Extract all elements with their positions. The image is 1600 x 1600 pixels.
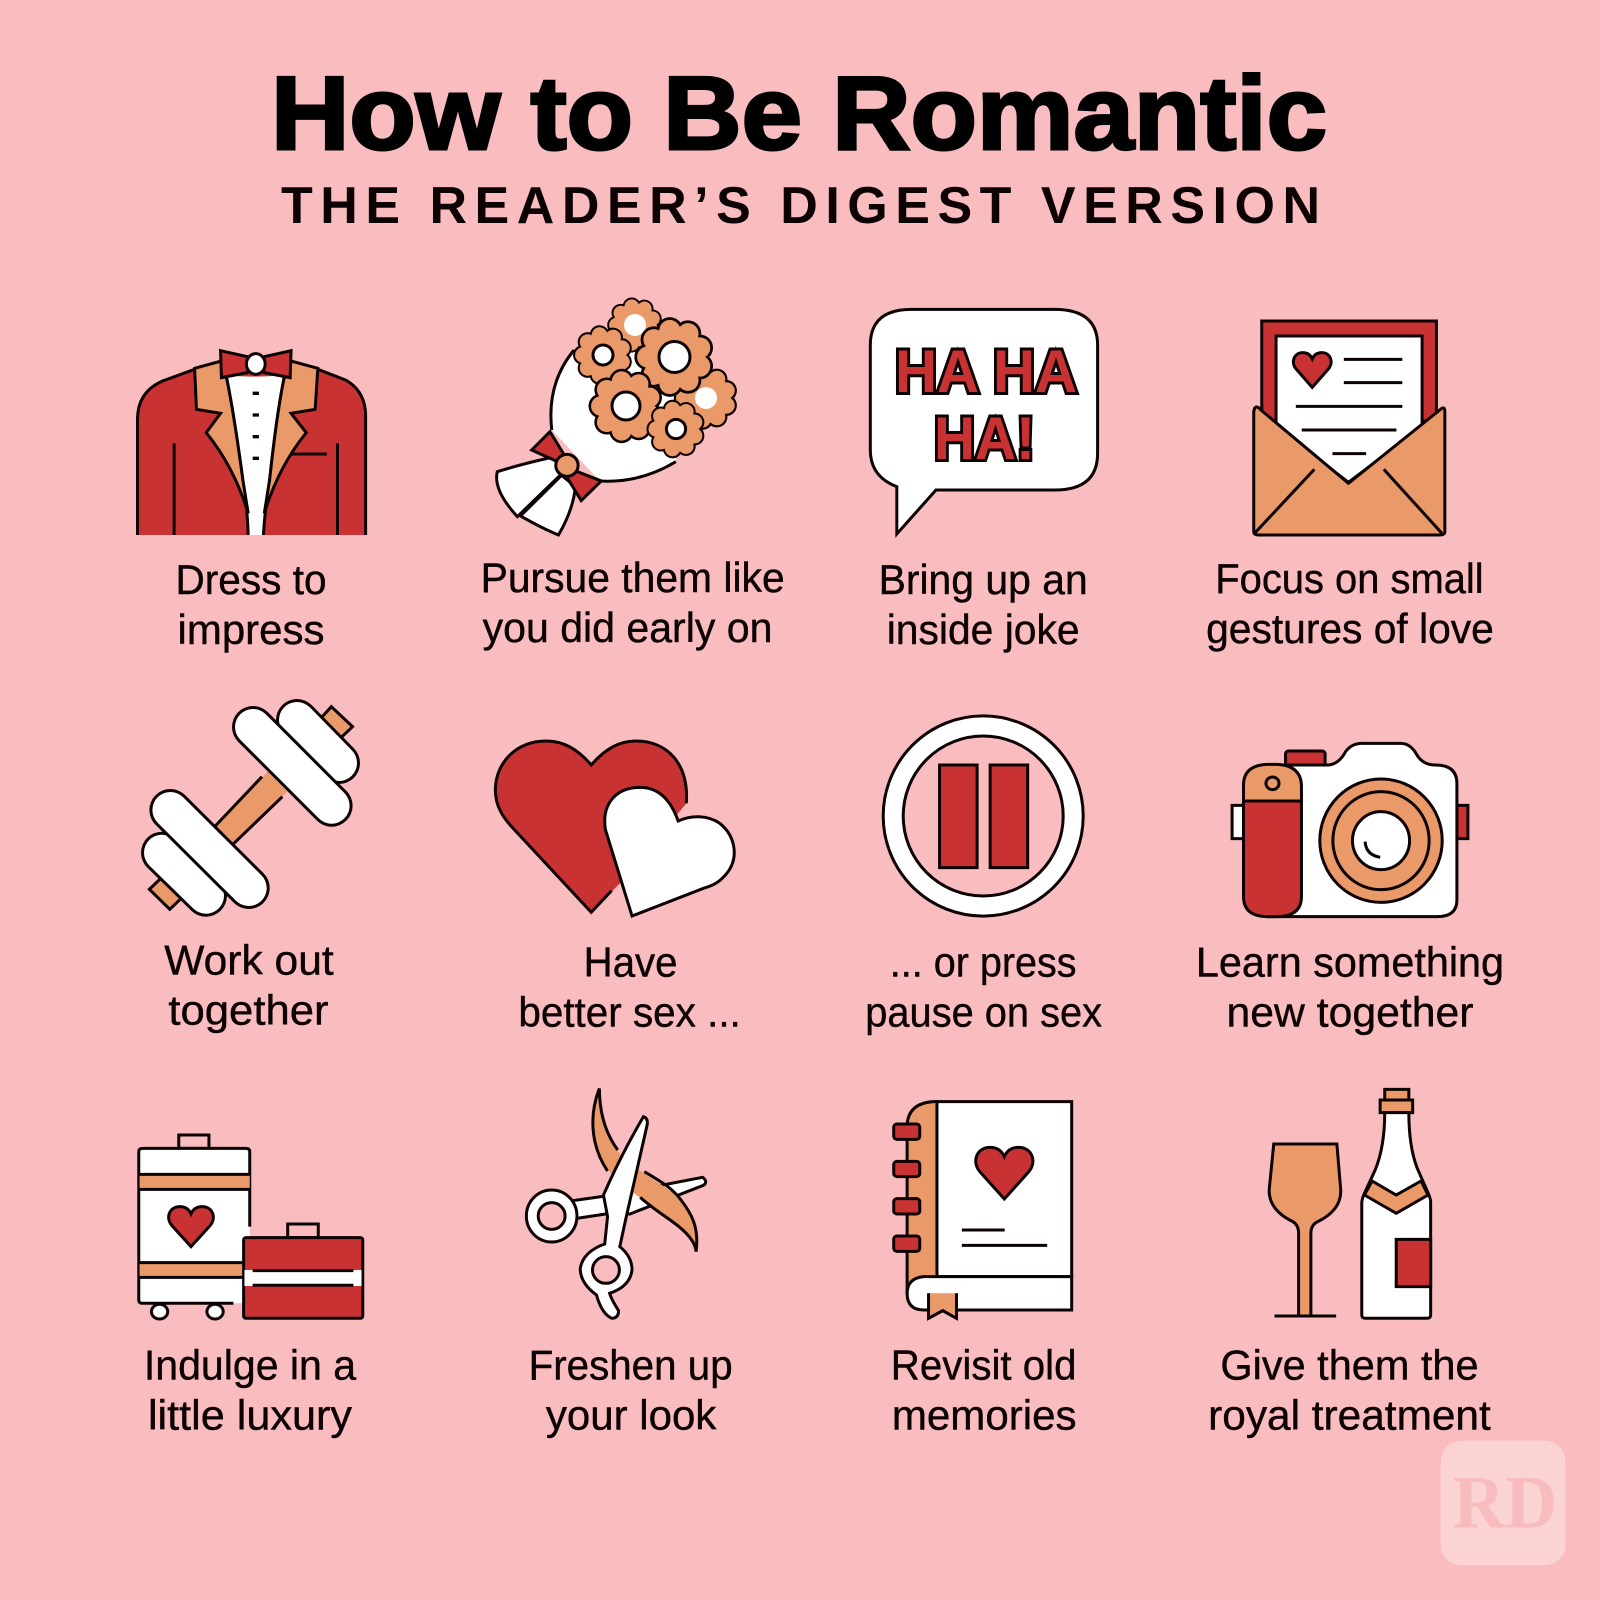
label: pursue them: Pursue them like <box>481 554 785 601</box>
label: learn something <box>1196 939 1504 1036</box>
icon: speech bubble with laughter <box>870 309 1098 534</box>
label: freshen up <box>529 1342 733 1439</box>
label: freshen up: your look <box>546 1392 716 1439</box>
label: little luxury: little luxury <box>148 1392 352 1439</box>
label: dress to impress <box>176 556 327 653</box>
label: pause on sex: pause on sex <box>865 989 1102 1036</box>
label: pause on sex: ... or press <box>890 939 1077 986</box>
label: work out <box>164 936 334 1033</box>
icon: scissors and hair <box>526 1088 706 1318</box>
icon: speech bubble with laughter: HA HA <box>895 338 1077 405</box>
label: dress to impress: impress <box>178 606 324 653</box>
logo: RD badge: RD <box>1453 1462 1557 1545</box>
icon: wine glass and champagne bottle <box>1269 1089 1431 1318</box>
label: royal treatment: royal treatment <box>1208 1392 1491 1439</box>
label: little luxury <box>144 1342 357 1439</box>
label: inside joke: Bring up an <box>879 556 1088 603</box>
label: revisit memories <box>891 1342 1077 1439</box>
icon: tuxedo jacket <box>137 351 367 535</box>
icon: speech bubble with laughter: HA! <box>934 405 1035 472</box>
label: inside joke <box>879 556 1088 653</box>
label: pursue them <box>481 554 785 651</box>
label: dress to impress: Dress to <box>176 556 327 603</box>
label: inside joke: inside joke <box>887 606 1080 653</box>
icon: love letter envelope <box>1254 321 1445 535</box>
label: royal treatment <box>1208 1342 1491 1439</box>
label: learn something: Learn something <box>1196 939 1504 986</box>
icon: two hearts <box>495 741 734 916</box>
label: small gestures: Focus on small <box>1215 555 1484 602</box>
label: work out: Work out <box>164 936 334 983</box>
subtitle: THE READER’S DIGEST VERSION <box>281 177 1320 235</box>
label: pause on sex <box>865 939 1102 1036</box>
label: learn something: new together <box>1227 989 1474 1036</box>
label: small gestures: gestures of love <box>1206 605 1494 652</box>
label: revisit memories: Revisit old <box>891 1342 1077 1389</box>
label: better sex <box>518 939 741 1036</box>
icon: dumbbell <box>149 707 353 909</box>
label: royal treatment: Give them the <box>1220 1342 1479 1389</box>
icon: camera <box>1232 743 1468 917</box>
icon: luggage <box>139 1135 363 1319</box>
title: How to Be Romantic <box>271 56 1327 172</box>
logo: RD badge <box>1441 1441 1565 1565</box>
label: work out: together <box>168 986 329 1033</box>
label: little luxury: Indulge in a <box>144 1342 357 1389</box>
icon: memory book <box>894 1102 1072 1318</box>
label: freshen up: Freshen up <box>529 1342 733 1389</box>
label: pursue them: you did early on <box>483 604 772 651</box>
label: better sex: Have <box>584 939 678 986</box>
icon: flower bouquet <box>497 298 736 535</box>
label: revisit memories: memories <box>892 1392 1077 1439</box>
icon: pause button <box>883 716 1083 916</box>
label: small gestures <box>1206 555 1494 652</box>
label: better sex: better sex ... <box>518 989 741 1036</box>
